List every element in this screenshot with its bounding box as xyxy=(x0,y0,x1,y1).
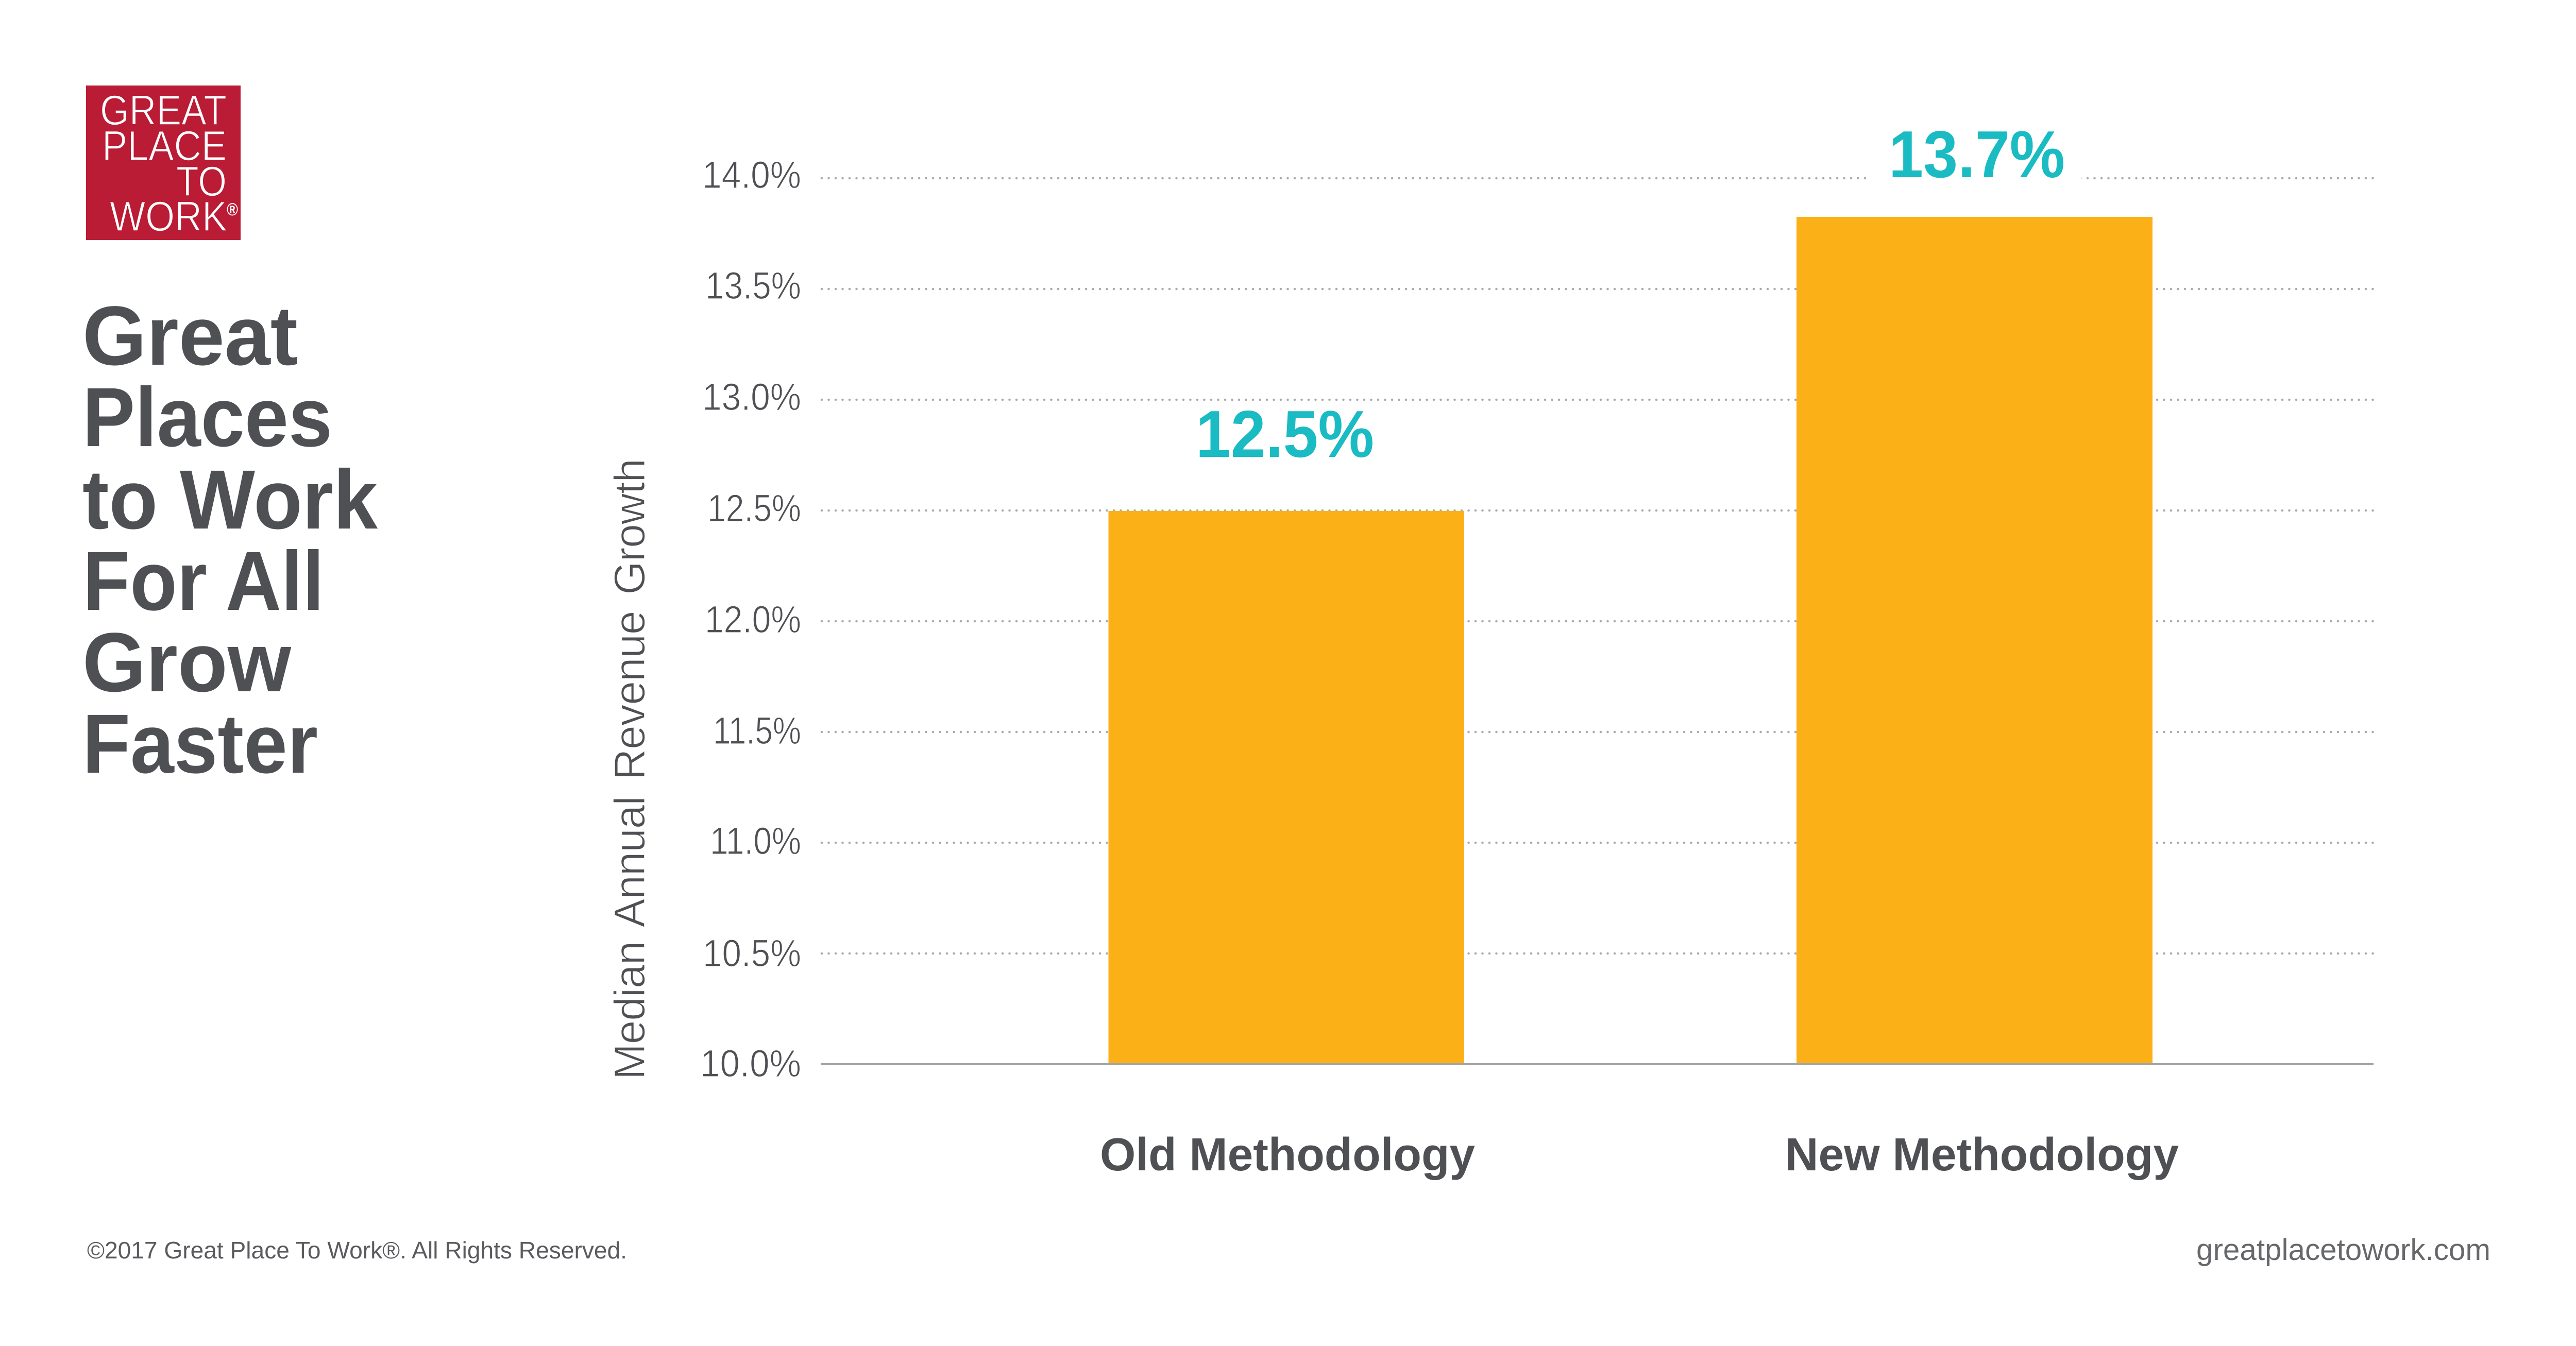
title: Great xyxy=(82,288,298,383)
logo: Great Place To Work: ® xyxy=(227,200,238,219)
value label: new methodology: 13.7% xyxy=(1889,117,2065,192)
title: to Work xyxy=(82,452,378,547)
logo: Great Place To Work xyxy=(86,86,241,240)
y-axis tick labels: 10.5% xyxy=(703,932,801,975)
y-axis tick labels xyxy=(700,154,801,1085)
logo: Great Place To Work: WORK xyxy=(110,193,227,240)
title: For All xyxy=(83,534,324,628)
y-axis tick labels: 11.5% xyxy=(713,709,801,752)
y-axis tick labels: 13.5% xyxy=(705,264,801,307)
website footer: greatplacetowork.com xyxy=(2196,1233,2490,1267)
chart gridlines xyxy=(822,178,2373,953)
y-axis tick labels: 12.5% xyxy=(707,487,801,530)
bar: old methodology xyxy=(1109,511,1464,1063)
title: Faster xyxy=(82,696,318,791)
y-axis title: Median Annual Revenue Growth xyxy=(605,458,654,1080)
logo: Great Place To Work: PLACE xyxy=(102,123,227,169)
title: Grow xyxy=(82,615,292,709)
logo: Great Place To Work: GREAT xyxy=(100,87,227,134)
y-axis tick labels: 11.0% xyxy=(710,820,801,862)
logo: Great Place To Work: TO xyxy=(176,158,227,205)
title: Places xyxy=(82,370,332,464)
y-axis tick labels: 14.0% xyxy=(702,154,801,196)
y-axis tick labels: 12.0% xyxy=(705,598,801,641)
copyright footer: ©2017 Great Place To Work®. All Rights Reserved. xyxy=(87,1237,627,1264)
bar: new methodology xyxy=(1797,217,2153,1063)
x axis line xyxy=(821,1063,2374,1065)
category label: new methodology: New Methodology xyxy=(1785,1129,2179,1181)
label gap behind new methodology value xyxy=(1866,174,2081,182)
title xyxy=(82,288,378,791)
category label: old methodology: Old Methodology xyxy=(1100,1129,1475,1181)
y-axis tick labels: 13.0% xyxy=(702,376,801,418)
y-axis tick labels: 10.0% xyxy=(700,1042,801,1085)
value label: old methodology: 12.5% xyxy=(1196,397,1374,471)
